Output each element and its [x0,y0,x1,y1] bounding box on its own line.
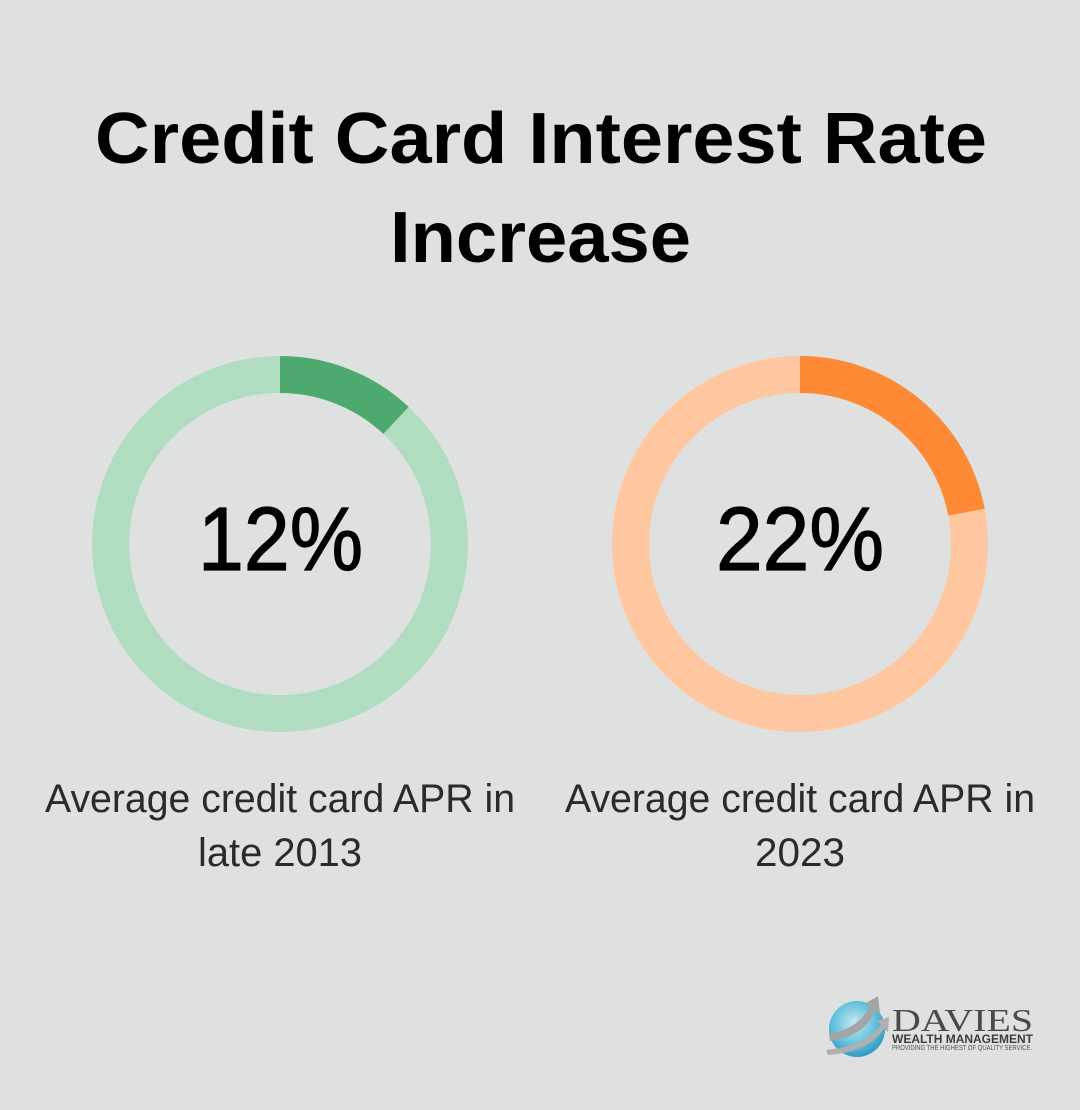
title: Credit Card Interest Rate [95,99,987,179]
value: 12%: 12% [198,490,363,590]
value: 22%: 22% [716,490,884,590]
wordmark: PROVIDING THE HIGHEST OF QUALITY SERVICE. [892,1045,1032,1052]
caption: late 2013 [45,777,515,875]
caption: 2023: 2023 [755,831,845,875]
wordmark: DAVIES [892,1002,1033,1038]
wordmark [892,1002,1034,1052]
caption: 2023 [565,777,1035,875]
wordmark: WEALTH MANAGEMENT [892,1032,1034,1046]
title: Increase [390,198,691,278]
panel: 22% donut and caption [565,374,1035,875]
title [95,99,987,278]
icon: globe with arrows [826,996,889,1057]
logo: Davies Wealth Management [826,996,1034,1057]
caption: late 2013: late 2013 [198,831,362,875]
caption: 2023: Average credit card APR in [565,777,1035,821]
caption: late 2013: Average credit card APR in [45,777,515,821]
donut chart: 22 percent [630,374,970,714]
panel: 12% donut and caption [45,374,515,875]
donut chart: 12 percent [110,374,450,714]
